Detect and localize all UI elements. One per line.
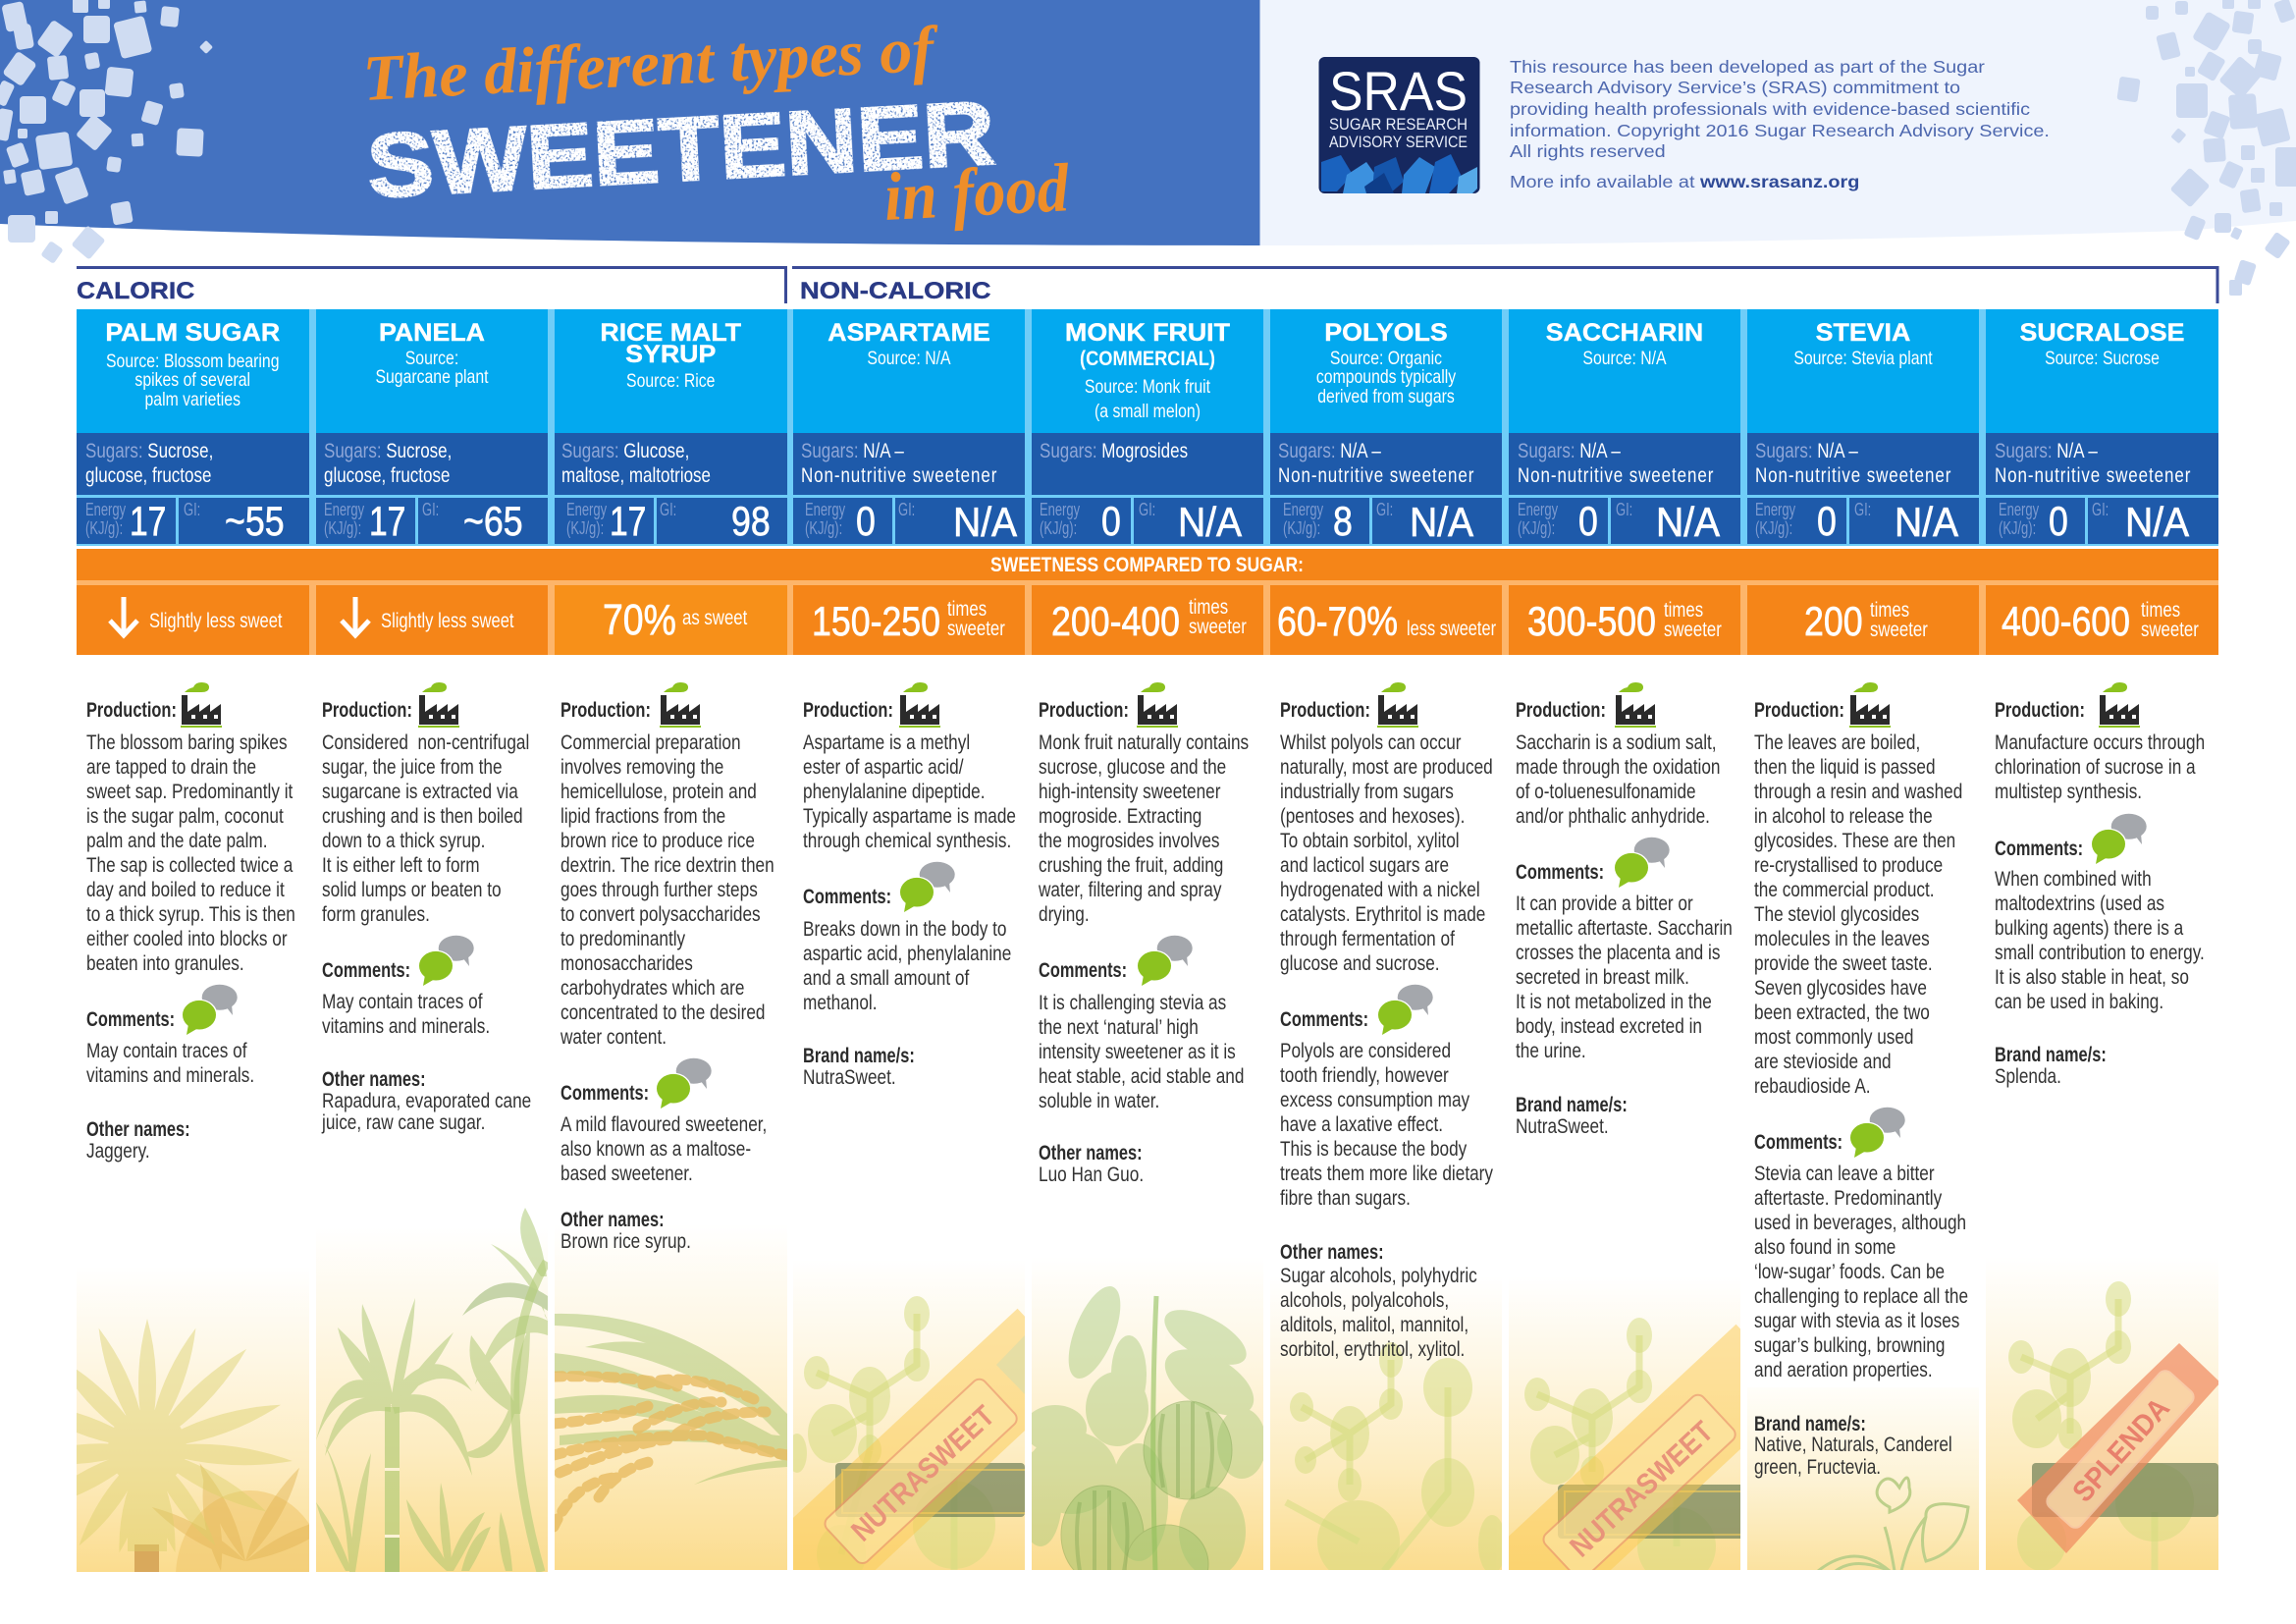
sugars: Sugars: N/A – Non-nutritive sweetener	[1755, 438, 1951, 487]
comments text: May contain traces of vitamins and minerals.	[86, 1039, 254, 1086]
energy: Energy (KJ/g):	[85, 500, 126, 538]
production label: Production:	[803, 699, 892, 722]
icon: factory	[1849, 682, 1891, 728]
sweetness: times sweeter	[1189, 595, 1247, 638]
sweetness	[1509, 585, 1740, 655]
name and source: Source: Sucrose	[2045, 348, 2160, 369]
GI	[418, 498, 548, 544]
sugars: Sugars: N/A – Non-nutritive sweetener	[1278, 438, 1474, 487]
sweetness: Slightly less sweet	[149, 609, 283, 632]
comments label: Comments:	[1516, 861, 1604, 884]
GI	[657, 498, 787, 544]
production label: Production:	[561, 699, 651, 722]
brand names label: Brand name/s:	[1754, 1413, 1866, 1435]
production label: Production:	[1280, 699, 1370, 722]
name and source: Source: Sugarcane plant	[375, 348, 489, 388]
production text: Manufacture occurs through chlorination of sucrose in a multistep synthesis.	[1995, 731, 2205, 803]
icon: speech bubbles	[1138, 935, 1193, 986]
energy: Energy (KJ/g):	[324, 500, 364, 538]
sugars	[1747, 433, 1979, 495]
GI: GI:	[1616, 500, 1632, 519]
energy	[1270, 498, 1369, 544]
GI: N/A	[1895, 499, 1958, 545]
energy: 17	[130, 498, 166, 544]
sugars	[793, 433, 1025, 495]
info text block: This resource has been developed as part of the Sugar Research Advisory Service’s (SRAS) commitment to providing health professionals with evidence-based scientific information. Copyright 2016 Sugar Research Advisory Service. All rights reserved	[1510, 57, 2050, 161]
GI: GI:	[898, 500, 915, 519]
sweetness bar	[77, 549, 2218, 580]
brand names label: Brand name/s:	[1516, 1094, 1628, 1116]
sweetness: 60-70%	[1277, 598, 1398, 644]
name and source	[1509, 309, 1740, 433]
GI: N/A	[1410, 499, 1473, 545]
brand names text: NutraSweet.	[803, 1064, 895, 1088]
icon: speech bubbles	[1378, 984, 1433, 1035]
light blue grid backing	[77, 309, 2218, 546]
sugars: Sugars: N/A – Non-nutritive sweetener	[1518, 438, 1714, 487]
sweetness	[316, 585, 548, 655]
icon: factory	[1615, 682, 1656, 728]
pale info panel	[1259, 0, 2296, 245]
icon: factory	[1137, 682, 1178, 728]
other names label: Other names:	[1039, 1142, 1143, 1164]
production label: Production:	[322, 699, 411, 722]
brand names text: Native, Naturals, Canderel green, Fructevia.	[1754, 1432, 1952, 1479]
sugars	[1032, 433, 1263, 495]
GI	[895, 498, 1025, 544]
GI: GI:	[1139, 500, 1155, 519]
comments label: Comments:	[1995, 838, 2083, 860]
comments label: Comments:	[1754, 1131, 1842, 1154]
column: panela	[316, 309, 548, 1134]
icon: factory	[418, 682, 459, 728]
scene: aspartame molecule and NutraSweet label: NUTRASWEET	[845, 1399, 1001, 1547]
GI: GI:	[660, 500, 676, 519]
production label: Production:	[86, 699, 176, 722]
column: stevia	[1747, 309, 1979, 1479]
title word: SWEETENER: SWEETENER	[365, 83, 997, 217]
sweetness	[77, 585, 308, 655]
icon: factory	[2099, 682, 2140, 728]
name and source: (COMMERCIAL)	[1080, 348, 1215, 370]
sugars	[316, 433, 548, 495]
energy: Energy (KJ/g):	[1755, 500, 1795, 538]
heading: caloric: CALORIC	[77, 277, 194, 304]
sweetness: 150-250	[812, 598, 940, 644]
SRAS logo: SUGAR RESEARCH	[1329, 115, 1468, 134]
scene: stevia plant outline	[1747, 1395, 1979, 1570]
sweetness: Slightly less sweet	[381, 609, 514, 632]
brand names text: Splenda.	[1995, 1064, 2061, 1088]
GI: N/A	[2125, 499, 2189, 545]
column: sucralose	[1986, 309, 2218, 1088]
sweetness: times sweeter	[1870, 599, 1928, 640]
other names label: Other names:	[86, 1118, 189, 1141]
column: saccharin	[1509, 309, 1740, 1137]
name and source	[77, 309, 308, 433]
production text: The blossom baring spikes are tapped to drain the sweet sap. Predominantly it is the sugar palm, coconut palm and the date palm. The sap is collected twice a day and boiled to reduce it to a thick syrup. This is then either cooled into blocks or beaten into granules.	[86, 731, 294, 974]
sugars: Sugars: Mogrosides	[1040, 438, 1188, 461]
sweetness	[1986, 585, 2218, 655]
sweetness: 300-500	[1527, 598, 1656, 644]
energy	[793, 498, 892, 544]
GI: GI:	[1854, 500, 1871, 519]
comments label: Comments:	[561, 1082, 649, 1105]
GI: ~55	[225, 498, 285, 544]
sweetness	[793, 585, 1025, 655]
sweetness: 400-600	[2002, 598, 2130, 644]
sweetness	[1747, 585, 1979, 655]
energy: Energy (KJ/g):	[1518, 500, 1558, 538]
energy: 17	[369, 498, 405, 544]
other names label: Other names:	[1280, 1241, 1383, 1264]
name and source	[316, 309, 548, 433]
comments text: Polyols are considered tooth friendly, however excess consumption may have a laxative effect. This is because the body treats them more like dietary fibre than sugars.	[1280, 1039, 1493, 1210]
energy	[316, 498, 415, 544]
scene: rice plant	[555, 1257, 787, 1570]
energy: 0	[1101, 498, 1121, 544]
production text: Aspartame is a methyl ester of aspartic acid/ phenylalanine dipeptide. Typically aspartame is made through chemical synthesis.	[803, 731, 1015, 852]
decorative sugar cubes right	[2116, 0, 2296, 296]
icon: speech bubbles	[1615, 837, 1670, 888]
scene: sugarcane	[316, 1208, 548, 1572]
production label: Production:	[1039, 699, 1129, 722]
sweetness	[1270, 585, 1502, 655]
GI: N/A	[953, 499, 1017, 545]
energy	[1747, 498, 1846, 544]
production text: Commercial preparation involves removing the hemicellulose, protein and lipid fractions from the brown rice to produce rice dextrin. The rice dextrin then goes through further steps to convert polysaccharides to predominantly monosaccharides carbohydrates which are concentrated to the desired water content.	[561, 731, 774, 1049]
brand names label: Brand name/s:	[1995, 1044, 2107, 1066]
name and source: Source: Rice	[626, 369, 715, 391]
energy: Energy (KJ/g):	[1282, 500, 1323, 538]
icon: factory	[660, 682, 701, 728]
GI	[179, 498, 308, 544]
name and source: SUCRALOSE	[2020, 319, 2184, 347]
name and source: Source: Blossom bearing spikes of several palm varieties	[106, 350, 279, 410]
energy: 0	[1578, 498, 1598, 544]
title line: in food: in food	[882, 150, 1071, 236]
sweetness: times sweeter	[947, 597, 1005, 640]
energy: Energy (KJ/g):	[805, 500, 845, 538]
GI: N/A	[1178, 499, 1242, 545]
energy: 0	[1817, 498, 1837, 544]
comments label: Comments:	[1039, 959, 1127, 982]
GI: GI:	[1376, 500, 1393, 519]
name and source: Source: N/A	[1582, 348, 1667, 369]
sugars	[1509, 433, 1740, 495]
other names text: Luo Han Guo.	[1039, 1163, 1144, 1186]
scene: aspartame molecule and NutraSweet label	[793, 1289, 1025, 1570]
scene: sucralose molecule and Splenda label	[1986, 1281, 2218, 1570]
scene: polyol molecule	[1270, 1304, 1502, 1570]
column: palm sugar	[77, 309, 309, 1163]
light orange grid backing	[77, 549, 2218, 655]
sugars	[555, 433, 787, 495]
GI: GI:	[2092, 500, 2109, 519]
GI: GI:	[184, 500, 200, 519]
name and source: ASPARTAME	[828, 319, 990, 347]
energy: 0	[856, 498, 876, 544]
icon: speech bubbles	[1850, 1108, 1905, 1158]
name and source: Source: Stevia plant	[1793, 348, 1933, 369]
decorative sugar cubes left	[0, 0, 213, 264]
energy	[1509, 498, 1608, 544]
scene: sucralose molecule and Splenda label: SPLENDA	[2066, 1392, 2176, 1508]
name and source: STEVIA	[1816, 319, 1910, 347]
comments text: A mild flavoured sweetener, also known as a maltose- based sweetener.	[561, 1111, 768, 1184]
icon: speech bubbles	[900, 862, 955, 912]
energy	[555, 498, 654, 544]
GI	[1372, 498, 1502, 544]
column: monk fruit	[1032, 309, 1263, 1186]
comments text: Stevia can leave a bitter aftertaste. Predominantly used in beverages, although also found in some ‘low-sugar’ foods. Can be challenging to replace all the sugar with stevia as it loses sugar’s bulking, browning and aeration properties.	[1754, 1161, 1968, 1380]
scene: saccharin molecule and NutraSweet label	[1509, 1304, 1740, 1570]
name and source: Source: Monk fruit (a small melon)	[1085, 376, 1210, 422]
energy: Energy (KJ/g):	[1040, 500, 1080, 538]
production text: Saccharin is a sodium salt, made through the oxidation of o-toluenesulfonamide and/or phthalic anhydride.	[1516, 731, 1720, 827]
name and source	[1032, 309, 1263, 433]
icon: speech bubbles	[657, 1058, 712, 1109]
sugars: Sugars: Glucose, maltose, maltotriose	[561, 438, 711, 487]
GI	[2088, 498, 2218, 544]
heading: non-caloric: NON-CALORIC	[800, 277, 991, 304]
scene: palm trees	[77, 1295, 309, 1572]
sweetness: 70%	[603, 596, 676, 644]
energy: 0	[2049, 498, 2068, 544]
sugars: Sugars: Sucrose, glucose, fructose	[85, 438, 213, 487]
comments text: When combined with maltodextrins (used as bulking agents) there is a small contribution to energy. It is also stable in heat, so can be used in baking.	[1995, 866, 2205, 1013]
energy	[1986, 498, 2085, 544]
SRAS logo	[1319, 57, 1480, 193]
sweetness: less sweeter	[1407, 617, 1496, 640]
section rule: non-caloric	[792, 267, 2217, 303]
sweetness: as sweet	[682, 607, 747, 628]
icon: factory	[1377, 682, 1418, 728]
energy	[77, 498, 176, 544]
column: aspartame	[793, 309, 1025, 1088]
icon: speech bubbles	[2092, 813, 2147, 864]
other names text: Jaggery.	[86, 1139, 149, 1163]
sugars	[1986, 433, 2218, 495]
scene: monk fruit vine	[1032, 1286, 1263, 1570]
name and source	[793, 309, 1025, 433]
production text: Whilst polyols can occur naturally, most are produced industrially from sugars (pentoses and hexoses). To obtain sorbitol, xylitol and lacticol sugars are hydrogenated with a nickel catalysts. Erythritol is made through fermentation of glucose and sucrose.	[1280, 731, 1492, 974]
sugars	[77, 433, 308, 495]
GI: ~65	[463, 498, 523, 544]
GI	[1134, 498, 1263, 544]
comments text: May contain traces of vitamins and minerals.	[322, 990, 490, 1037]
column: rice malt syrup	[555, 309, 787, 1253]
energy: 8	[1333, 498, 1353, 544]
sweetness: times sweeter	[1664, 599, 1722, 640]
name and source	[555, 309, 787, 433]
SRAS logo: ADVISORY SERVICE	[1329, 133, 1468, 151]
other names label: Other names:	[561, 1209, 665, 1231]
comments label: Comments:	[86, 1008, 175, 1031]
name and source: Source: N/A	[867, 348, 951, 369]
brand names label: Brand name/s:	[803, 1045, 914, 1067]
title line: The different types of: The different types of	[361, 13, 941, 115]
blue title banner	[0, 0, 1260, 245]
production text: Considered non-centrifugal sugar, the juice from the sugarcane is extracted via crushing and is then boiled down to a thick syrup. It is either left to form solid lumps or beaten to form granules.	[322, 731, 529, 925]
sweetness: times sweeter	[2140, 599, 2198, 640]
sweetness: 200-400	[1050, 598, 1180, 644]
column: polyols	[1270, 309, 1502, 1361]
icon: speech bubbles	[183, 984, 238, 1035]
sweetness bar: SWEETNESS COMPARED TO SUGAR:	[990, 554, 1304, 576]
other names text: Sugar alcohols, polyhydric alcohols, polyalcohols, alditols, malitol, mannitol, sorbitol, erythritol, xylitol.	[1280, 1263, 1476, 1361]
comments label: Comments:	[322, 959, 410, 982]
GI: GI:	[422, 500, 439, 519]
comments text: It is challenging stevia as the next ‘natural’ high intensity sweetener as it is heat stable, acid stable and soluble in water.	[1039, 990, 1245, 1111]
production label: Production:	[1516, 699, 1606, 722]
other names text: Rapadura, evaporated cane juice, raw cane sugar.	[322, 1088, 531, 1134]
energy: Energy (KJ/g):	[1999, 500, 2039, 538]
sweetness	[1032, 585, 1263, 655]
brand names text: NutraSweet.	[1516, 1113, 1609, 1137]
energy: 17	[610, 498, 646, 544]
SRAS logo: SRAS	[1329, 60, 1468, 122]
icon: factory	[181, 682, 222, 728]
sweetness: 200	[1804, 598, 1863, 644]
name and source	[1986, 309, 2218, 433]
name and source: PALM SUGAR	[105, 319, 280, 347]
production text: The leaves are boiled, then the liquid is passed through a resin and washed in alcohol to release the glycosides. These are then re-crystallised to produce the commercial product. The steviol glycosides molecules in the leaves provide the sweet taste. Seven glycosides have been extracted, the two most commonly used are stevioside and rebaudioside A.	[1754, 731, 1962, 1098]
sugars	[1270, 433, 1502, 495]
energy: Energy (KJ/g):	[566, 500, 607, 538]
sugars: Sugars: Sucrose, glucose, fructose	[324, 438, 452, 487]
comments label: Comments:	[1280, 1008, 1368, 1031]
name and source	[1270, 309, 1502, 433]
sweetness	[555, 585, 787, 655]
production text: Monk fruit naturally contains sucrose, glucose and the high-intensity sweetener mogroside. Extracting the mogrosides involves crushing the fruit, adding water, filtering and spray drying.	[1039, 731, 1250, 925]
section rule: caloric	[77, 267, 785, 303]
production label: Production:	[1995, 699, 2085, 722]
sugars: Sugars: N/A – Non-nutritive sweetener	[801, 438, 997, 487]
scene: saccharin molecule and NutraSweet label: NUTRASWEET	[1564, 1415, 1720, 1563]
GI: N/A	[1656, 499, 1720, 545]
name and source: MONK FRUIT	[1065, 319, 1230, 347]
production label: Production:	[1754, 699, 1844, 722]
other names label: Other names:	[322, 1068, 425, 1091]
comments label: Comments:	[803, 886, 891, 908]
name and source: PANELA	[379, 319, 485, 347]
icon: speech bubbles	[419, 935, 474, 986]
icon: factory	[899, 682, 940, 728]
comments text: It can provide a bitter or metallic aftertaste. Saccharin crosses the placenta and is secreted in breast milk. It is not metabolized in the body, instead excreted in the urine.	[1516, 892, 1733, 1062]
energy	[1032, 498, 1131, 544]
name and source: Source: Organic compounds typically derived from sugars	[1316, 348, 1456, 406]
name and source: SACCHARIN	[1546, 319, 1703, 347]
name and source	[1747, 309, 1979, 433]
GI: 98	[731, 498, 771, 544]
other names text: Brown rice syrup.	[561, 1229, 691, 1253]
comments text: Breaks down in the body to aspartic acid, phenylalanine and a small amount of methanol.	[803, 917, 1011, 1013]
GI	[1611, 498, 1740, 544]
name and source: POLYOLS	[1324, 319, 1448, 347]
sugars: Sugars: N/A – Non-nutritive sweetener	[1995, 438, 2191, 487]
more info link text: More info available at www.srasanz.org	[1510, 172, 1859, 191]
GI	[1849, 498, 1979, 544]
name and source: RICE MALT SYRUP	[600, 319, 741, 368]
